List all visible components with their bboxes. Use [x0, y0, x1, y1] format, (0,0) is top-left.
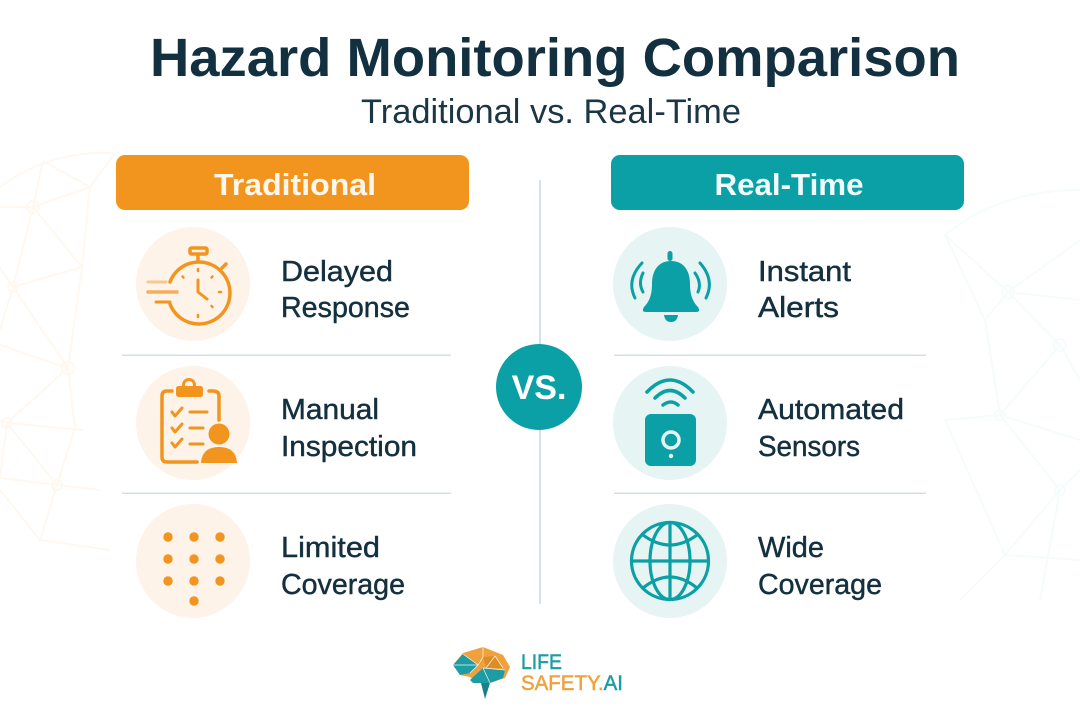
- label: automated sensors: Automated: [758, 394, 904, 426]
- logo wordmark: [521, 651, 623, 695]
- label: delayed response: [281, 256, 410, 324]
- icon: globe: [613, 504, 727, 618]
- label: wide coverage: [758, 532, 882, 601]
- label: delayed response: Response: [281, 292, 410, 324]
- title: Hazard Monitoring Comparison: [150, 28, 960, 88]
- label: automated sensors: Sensors: [758, 431, 860, 463]
- label: manual inspection: Manual: [281, 394, 379, 426]
- centre divider line: [539, 180, 541, 604]
- traditional header: Traditional: [214, 167, 376, 202]
- icon: polygon brain: [453, 647, 510, 699]
- icon: bell: [613, 227, 727, 341]
- panel: real-time: [611, 155, 964, 618]
- label: limited coverage: Limited: [281, 532, 380, 564]
- logo wordmark: LIFE: [521, 651, 562, 674]
- label: wide coverage: Wide: [758, 532, 824, 564]
- real-time header: [611, 155, 964, 210]
- icon: clipboard inspector: [136, 366, 250, 480]
- logo: life safety ai: [453, 647, 623, 699]
- vs badge: VS.: [512, 369, 566, 407]
- icon: sensor: [613, 366, 727, 480]
- label: limited coverage: [281, 532, 405, 601]
- panel: traditional: [116, 155, 469, 618]
- traditional header: [116, 155, 469, 210]
- label: manual inspection: [281, 394, 417, 463]
- label: manual inspection: Inspection: [281, 431, 417, 463]
- icon: stopwatch: [136, 227, 250, 341]
- real-time header: Real-Time: [714, 167, 864, 202]
- label: instant alerts: Instant: [758, 256, 851, 288]
- label: instant alerts: [758, 256, 851, 324]
- label: instant alerts: Alerts: [758, 292, 839, 324]
- label: wide coverage: Coverage: [758, 569, 882, 601]
- label: limited coverage: Coverage: [281, 569, 405, 601]
- label: automated sensors: [758, 394, 904, 463]
- vs badge: [496, 344, 582, 430]
- subtitle: Traditional vs. Real-Time: [361, 93, 741, 131]
- label: delayed response: Delayed: [281, 256, 393, 288]
- logo wordmark: SAFETY.AI: [521, 672, 623, 695]
- icon: sparse dots: [136, 504, 250, 618]
